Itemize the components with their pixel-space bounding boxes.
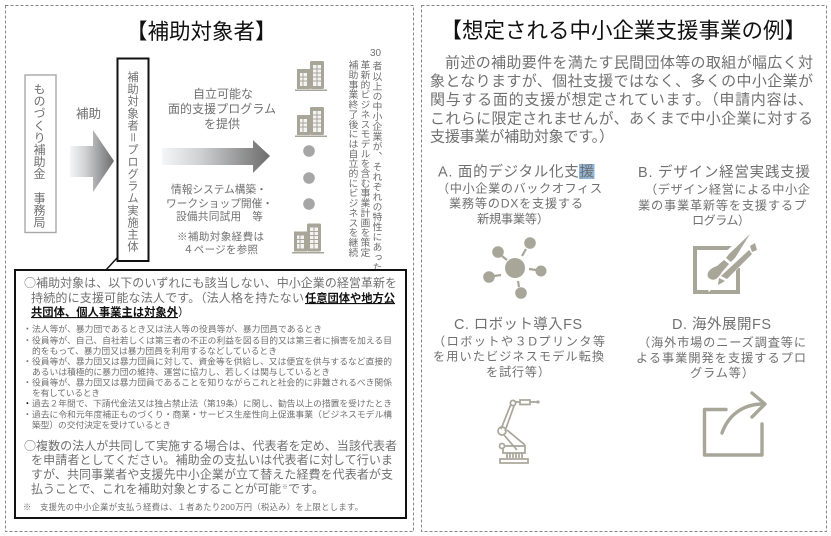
text: joint implementation: すが、共同事業者や支援先中小企業が立て替えた経費を代表者が支 [31,466,393,482]
footnote: 支援先の中小企業が支払う経費は、１者あたり200万円（税込み）を上限とします。 [40,502,363,512]
vertical text: 30 or more SMEs: 者以上の中小企業が、それぞれの特性にあった [370,61,382,272]
item C: robot FS: （ロボットや３Dプリンタ等 [433,334,605,348]
panel: target applicants [6,6,414,532]
item A: digital support: A. 面的デジタル化支援 [438,162,594,180]
box: program implementer: 補助対象者＝プログラム実施主体 [126,71,139,252]
list: exclusion criteria: 築型）の交付決定を受けているとき [32,419,171,430]
item B: design management [638,163,810,228]
list: exclusion criteria: 過去２年間で、下請代金法又は独占禁止法（第19条）に関し、勧告以上の措置を受けたとき [32,398,392,408]
icon: pen and brush [695,232,757,292]
list: exclusion criteria: ・ [23,324,32,334]
box: program implementer [118,58,148,261]
text: program contents: 情報システム構築・ [171,183,267,196]
item D: overseas FS: グラム等） [690,366,754,380]
text: introduction: これらに限定されませんが、あくまで中小企業に対する [430,110,813,128]
list: exclusion criteria: あるいは積極的に暴力団の維持、運営に協力し、若しくは関与しているとき [32,366,330,377]
icon: building 3 [292,224,324,254]
text: eligibility statement: ） [178,306,189,319]
list: exclusion criteria: 役員等が、自己、自社若しくは第三者の不正の利益を図る目的又は第三者に損害を加える目 [32,334,392,346]
text: introduction: 象となりますが、個社支援ではなく、多くの中小企業が [430,72,813,90]
panel: example support projects [422,6,826,532]
text: support program: 面的支援プログラム [168,101,276,116]
text: joint implementation: です。 [288,482,324,496]
item A: digital support: 業務等のDXを支援する [449,196,583,210]
item A: digital support: （中小企業のバックオフィス [437,180,602,196]
callout: eligibility conditions [15,270,406,518]
text: eligible expense note: ４ページを参照 [183,244,258,256]
icon: building 2 [295,107,327,137]
text: joint implementation: ○複数の法人が共同して実施する場合は、代表者を定め、当該代表者 [24,437,397,454]
item D: overseas FS: D. 海外展開FS [672,316,771,333]
list: exclusion criteria: ・ [23,410,32,420]
vertical text: 30 or more SMEs: 補助事業終了後には自立的にビジネスを継続 [346,59,358,258]
text: introduction: 前述の補助要件を満たす民間団体等の取組が幅広く対 [445,54,813,72]
text: joint implementation: ※ [282,484,288,491]
item B: design management: B. デザイン経営実践支援 [638,163,810,181]
text: eligible expense note [177,230,264,256]
text: eligibility statement: ○補助対象は、以下のいずれにも該当しない、中小企業の経営革新を [24,274,397,291]
item B: design management: 業の事業革新等を支援するプ [638,198,806,212]
text: introduction: 支援事業が補助対象です。） [430,128,614,146]
list: exclusion criteria [23,323,392,430]
icon: robot arm [498,400,539,463]
text: support program [168,87,276,131]
text: program contents [166,183,273,223]
text: introduction: 関与する面的支援が想定されています。（申請内容は、 [430,92,813,108]
item D: overseas FS [636,316,806,380]
item C: robot FS: C. ロボット導入FS [454,316,582,333]
list: exclusion criteria: 法人等が、暴力団であるとき又は法人等の役員等が、暴力団員であるとき [32,323,322,334]
vertical text: 30 or more SMEs: 30 [370,48,382,59]
box: secretariat [25,75,56,232]
list: exclusion criteria: ・ [23,378,32,388]
item A: digital support [437,162,602,226]
text: program contents: 設備共同試用 等 [176,210,263,223]
text: joint implementation [24,437,397,496]
list: exclusion criteria: 過去に令和元年度補正ものづくり・商業・サービス生産性向上促進事業（ビジネスモデル構 [32,408,392,420]
vertical text: 30 or more SMEs [346,48,382,272]
text: eligibility statement: 持続的に支援可能な法人です。（法人格を持たない [31,290,304,305]
item C: robot FS: を試行等） [486,365,550,379]
vertical text: 30 or more SMEs: 革新的ビジネスモデルを含む事業計画を策定 [358,59,370,258]
connector line [105,258,117,271]
list: exclusion criteria: ・ [23,336,32,346]
text: eligibility statement [24,274,397,319]
arrow: program flow [162,140,270,173]
icon: network [483,237,546,299]
item B: design management: （デザイン経営による中小企 [645,182,810,196]
heading: target applicants: 【補助対象者】 [126,20,277,44]
icon: ellipsis dots [303,145,315,210]
label: subsidy: 補助 [76,107,101,121]
list: exclusion criteria: 的をもって、暴力団又は暴力団員を利用するなどしているとき [32,345,277,356]
item C: robot FS: を用いたビジネスモデル転換 [433,348,604,364]
text: joint implementation: を申請者としてください。補助金の支払いは代表者に対して行いま [31,453,393,467]
item D: overseas FS: よる事業開発を支援するプロ [636,351,806,365]
list: exclusion criteria: を有しているとき [32,387,100,398]
text: eligible expense note: ※補助対象経費は [177,230,264,243]
text: eligibility statement: 共団体、個人事業主は対象外 [31,305,179,319]
box: secretariat: ものづくり補助金 事務局 [32,83,46,229]
text: program contents: ワークショップ開催・ [166,198,273,210]
text: support program: を提供 [204,116,240,131]
item C: robot FS [433,316,605,379]
item A: digital support: 新規事業等） [477,211,549,226]
text: introduction [430,54,813,146]
list: exclusion criteria: 役員等が、暴力団又は暴力団員に対して、資金等を供給し、又は便宜を供与するなど直接的 [32,356,392,366]
arrow: subsidy flow [70,130,114,192]
text: support program: 自立可能な [193,87,253,101]
text: eligibility statement: 任意団体や地方公 [305,291,395,305]
text: joint implementation: 払うことで、これを補助対象とすることが可能 [31,481,281,496]
item D: overseas FS: （海外市場のニーズ調査等に [638,334,806,350]
list: exclusion criteria: ・ [23,398,32,408]
item B: design management: ログラム） [692,214,750,228]
list: exclusion criteria: 役員等が、暴力団又は暴力団員であることを知りながらこれと社会的に非難されるべき関係 [32,376,392,388]
icon: share arrow [704,393,765,455]
list: exclusion criteria: ・ [23,356,32,366]
footnote: ※ [23,502,31,512]
icon: building 1 [295,61,327,91]
heading: example projects: 【想定される中小企業支援事業の例】 [440,19,806,43]
